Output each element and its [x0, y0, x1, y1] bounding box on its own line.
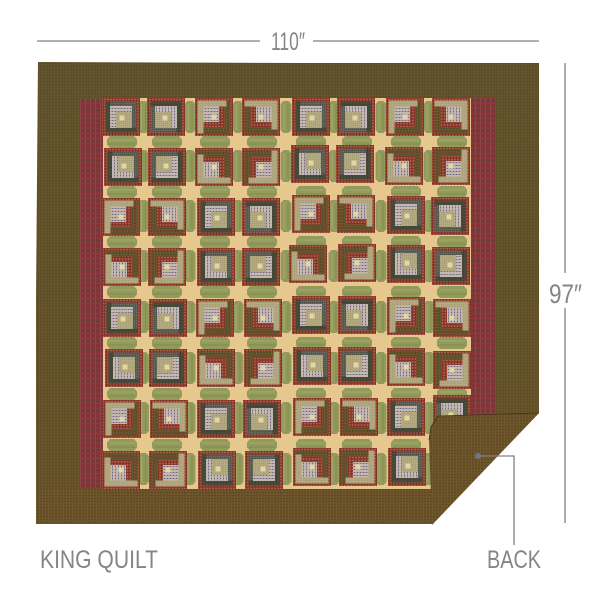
log cabin blocks row 1: [102, 98, 470, 136]
bottom border strip over block edges: [36, 489, 432, 524]
back callout leader: [475, 453, 514, 545]
red plaid inner border: [80, 98, 495, 488]
olive outer border: [36, 62, 539, 524]
log cabin blocks row 5: [103, 296, 471, 337]
green vertical sashing: [138, 101, 434, 485]
log cabin blocks row 4: [103, 244, 470, 286]
quilt: [36, 62, 539, 525]
width dimension: 110 inches: 110″: [271, 28, 305, 56]
log cabin blocks row 2: [104, 145, 470, 186]
folded corner showing back: [429, 413, 539, 525]
label: back: BACK: [487, 546, 541, 574]
green horizontal sashing: [107, 136, 467, 451]
cream star background: [103, 98, 471, 489]
log cabin blocks row 8: [102, 448, 426, 489]
label: king quilt: KING QUILT: [40, 546, 158, 574]
height dimension: 97 inches: 97″: [549, 279, 582, 309]
log cabin blocks row 6: [105, 347, 471, 389]
log cabin blocks row 7: [103, 395, 471, 438]
log cabin blocks row 3: [102, 195, 469, 236]
